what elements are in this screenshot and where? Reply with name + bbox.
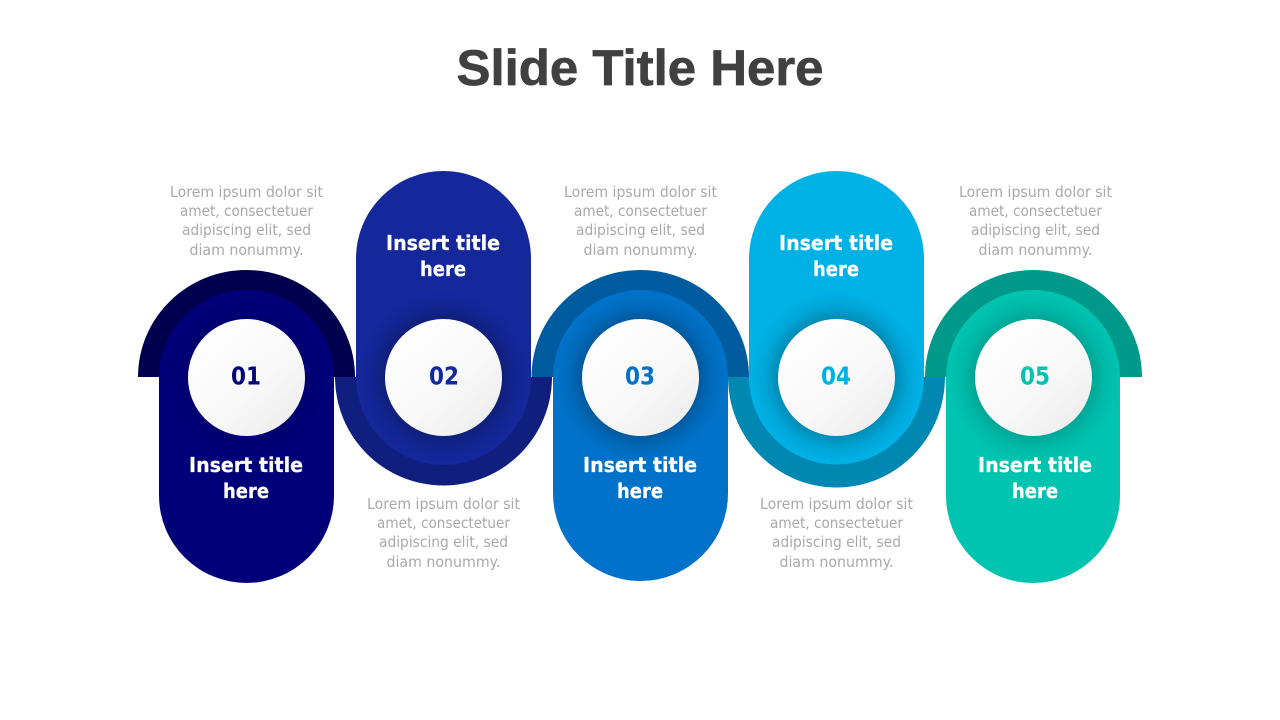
step 02 description: diam nonummy. — [386, 553, 500, 571]
step 01 disc — [188, 319, 305, 436]
step 04 number: 04 — [821, 362, 851, 390]
step 03 description: amet, consectetuer — [574, 202, 708, 220]
step 01 description: Lorem ipsum dolor sit — [170, 183, 323, 201]
step 01 pill — [159, 290, 334, 583]
step 04 arc — [728, 377, 945, 488]
step 02 number: 02 — [429, 362, 459, 390]
step 04 description: adipiscing elit, sed — [772, 533, 901, 551]
step 04 heading — [779, 231, 893, 281]
step 01 heading — [189, 453, 303, 503]
step 05 disc — [975, 319, 1092, 436]
step 04 disc — [778, 319, 895, 436]
step 04 heading: here — [813, 257, 859, 281]
step 01 heading: Insert title — [189, 453, 303, 477]
step 04 description: diam nonummy. — [780, 553, 894, 571]
step 05 heading — [978, 453, 1092, 503]
step 05 — [925, 270, 1142, 583]
step 05 heading: here — [1012, 479, 1058, 503]
step 01 number: 01 — [231, 362, 261, 390]
step 01 arc — [138, 270, 355, 377]
step 01 disc shadow — [162, 292, 332, 462]
step 03 description: diam nonummy. — [584, 241, 698, 259]
step 05 description: amet, consectetuer — [969, 202, 1103, 220]
step 01 description: adipiscing elit, sed — [182, 221, 311, 239]
step 03 number: 03 — [625, 362, 655, 390]
step 05 description: Lorem ipsum dolor sit — [959, 183, 1112, 201]
step 03 — [532, 270, 749, 581]
step 04 pill — [749, 171, 924, 464]
step 01 heading: here — [223, 479, 269, 503]
step 05 arc — [925, 270, 1142, 377]
step 02 pill — [356, 171, 531, 465]
step 02 heading — [386, 231, 500, 281]
step 01 description — [170, 183, 323, 259]
step 05 number: 05 — [1020, 362, 1050, 390]
step 01 — [138, 270, 355, 583]
title: Slide Title Here — [456, 40, 824, 96]
step 02 disc shadow — [369, 303, 518, 452]
step 04 heading: Insert title — [779, 231, 893, 255]
step 03 heading — [583, 453, 697, 503]
step 02 heading: Insert title — [386, 231, 500, 255]
step 04 disc shadow — [758, 300, 914, 456]
step 03 disc shadow — [564, 300, 718, 454]
step 03 heading: here — [617, 479, 663, 503]
step 03 disc — [582, 319, 699, 436]
step 04 description: amet, consectetuer — [770, 514, 904, 532]
step 05 description — [959, 183, 1112, 259]
step 02 disc — [385, 319, 502, 436]
step 04 — [728, 171, 945, 488]
step 02 description: adipiscing elit, sed — [379, 533, 508, 551]
step 02 description: Lorem ipsum dolor sit — [367, 495, 520, 513]
step 01 description: amet, consectetuer — [180, 202, 314, 220]
step 05 description: adipiscing elit, sed — [971, 221, 1100, 239]
step 03 description: Lorem ipsum dolor sit — [564, 183, 717, 201]
step 05 heading: Insert title — [978, 453, 1092, 477]
step 03 description — [564, 183, 717, 259]
step 03 arc — [532, 270, 749, 377]
step 02 arc — [335, 377, 552, 485]
step 03 description: adipiscing elit, sed — [576, 221, 705, 239]
step 05 disc shadow — [960, 304, 1106, 450]
step 03 pill — [553, 290, 728, 581]
step 02 description: amet, consectetuer — [377, 514, 511, 532]
step 05 description: diam nonummy. — [978, 241, 1092, 259]
step 02 — [335, 171, 552, 485]
step 04 description: Lorem ipsum dolor sit — [760, 495, 913, 513]
step 04 description — [760, 495, 913, 571]
step 02 description — [367, 495, 520, 571]
step 02 heading: here — [420, 257, 466, 281]
step 01 description: diam nonummy. — [190, 241, 304, 259]
step 03 heading: Insert title — [583, 453, 697, 477]
step 05 pill — [946, 290, 1120, 583]
